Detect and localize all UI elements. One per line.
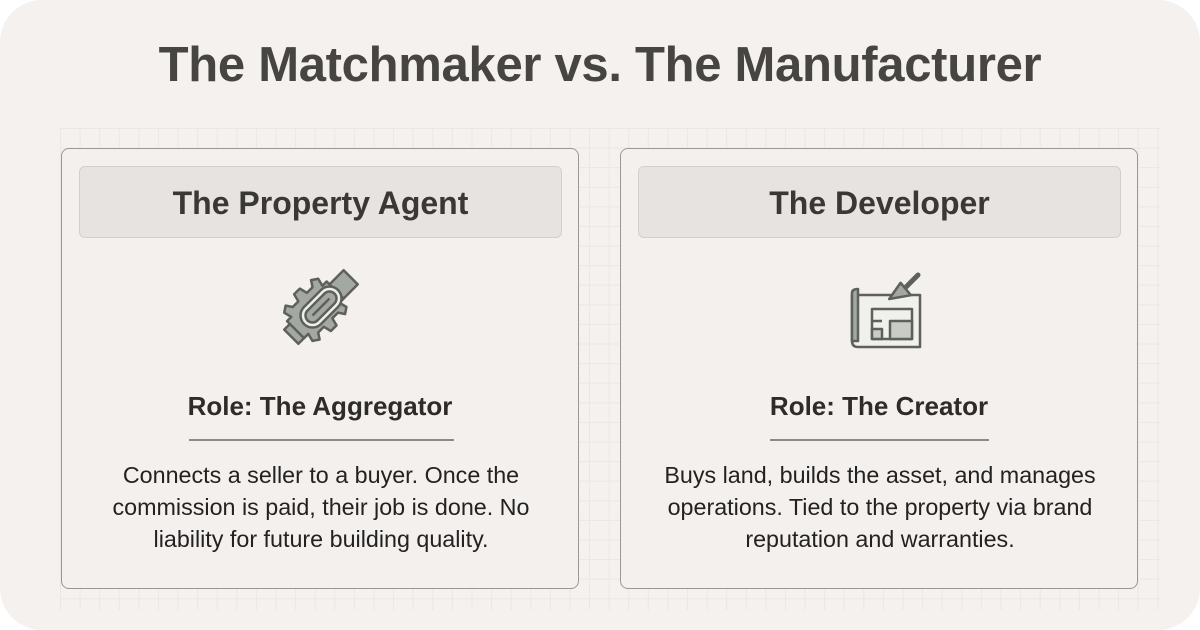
role: aggregator: Role: The Aggregator: [188, 391, 452, 421]
title: The Matchmaker vs. The Manufacturer: [159, 38, 1041, 92]
icon: blueprint with trowel: [850, 272, 922, 348]
text: developer description: Buys land, builds the asset, and manages operations. Tied to the property via brand reputation and warranties.: [664, 462, 1096, 552]
panel: developer: [620, 148, 1138, 589]
text: agent description: Connects a seller to a buyer. Once the commission is paid, their job is done. No liability for future building quality.: [113, 462, 529, 552]
panel: property agent: [61, 148, 579, 589]
heading: property agent: [79, 166, 562, 238]
heading: developer: The Developer: [769, 185, 990, 221]
role: creator: Role: The Creator: [770, 391, 988, 421]
icon: gear with link: [282, 268, 359, 346]
heading: developer: [638, 166, 1121, 238]
heading: property agent: The Property Agent: [173, 185, 468, 221]
